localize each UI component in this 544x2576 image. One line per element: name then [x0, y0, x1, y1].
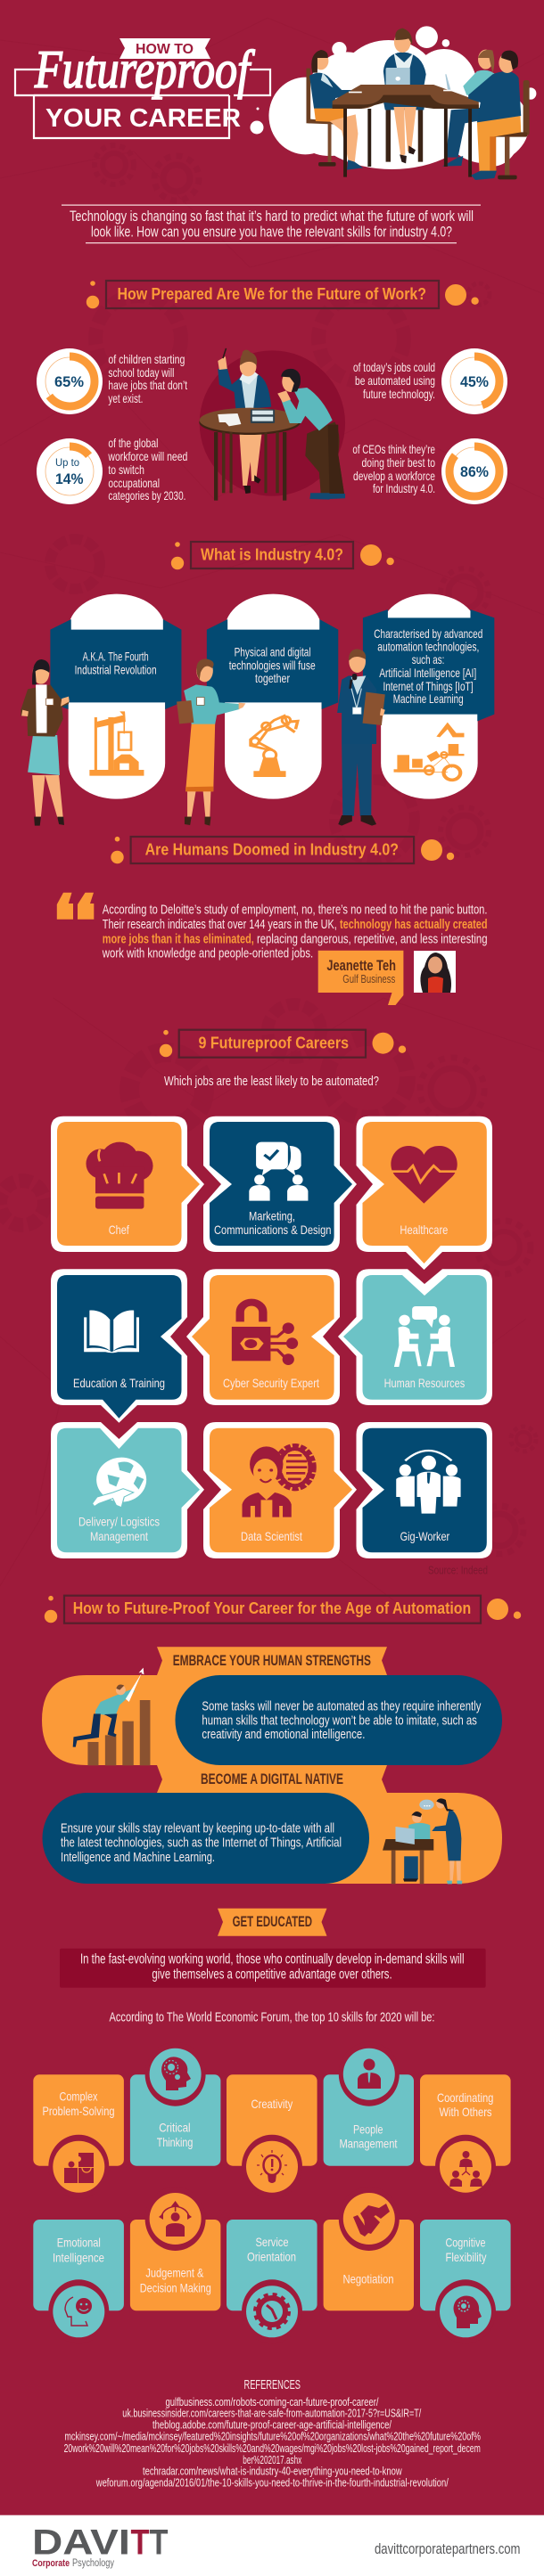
- skill: judgement and decision making: Decision Making: [140, 2280, 211, 2294]
- icon: person in suit: [358, 2058, 381, 2089]
- skill: service orientation: [227, 2220, 317, 2343]
- skill: cognitive flexibility: Cognitive: [446, 2236, 486, 2250]
- skill: critical thinking: [130, 2042, 220, 2166]
- career: gig worker: Gig-Worker: [400, 1529, 449, 1543]
- become text: the latest technologies, such as the Internet of Things, Artificial: [61, 1836, 342, 1851]
- card 1 text: [75, 650, 157, 677]
- illustration: woman and man at round table: [199, 348, 345, 501]
- card 3 text: Characterised by advanced: [374, 626, 482, 641]
- skill: critical thinking: Critical: [159, 2121, 191, 2135]
- skill: creativity: Creativity: [251, 2097, 293, 2111]
- icon: puzzle: [64, 2153, 94, 2183]
- your career: YOUR CAREER: [45, 104, 241, 133]
- stat: 65 percent: school today will: [108, 365, 174, 380]
- right woman: [442, 50, 497, 167]
- skill: emotional intelligence: Intelligence: [53, 2250, 104, 2264]
- become text: Intelligence and Machine Learning.: [61, 1851, 215, 1865]
- heading: how to future-proof: How to Future-Proof Your Career for the Age of Automation: [73, 1599, 471, 1617]
- icon: scientist and gear: [243, 1446, 312, 1517]
- career: cyber security: [186, 1269, 340, 1405]
- attribution callout: Jeanette Teh: [326, 957, 396, 974]
- icon: globe and plane: [92, 1458, 146, 1508]
- skill: complex problem-solving: Problem-Solving: [43, 2104, 114, 2118]
- industry cards art: [21, 594, 494, 826]
- card 3 text: Artificial Intelligence [AI]: [379, 666, 476, 680]
- stat: up to 14 percent: Up to: [55, 458, 79, 469]
- stat: 86 percent: [352, 438, 507, 504]
- career: healthcare: Healthcare: [400, 1223, 449, 1237]
- banner: embrace: [157, 1647, 387, 1675]
- references: ber%202017.ashx: [243, 2454, 302, 2466]
- banner: become: BECOME A DIGITAL NATIVE: [201, 1770, 343, 1787]
- card 3 text: Machine Learning: [393, 691, 464, 706]
- icon: decision arrows: [159, 2201, 192, 2237]
- references: uk.businessinsider.com/careers-that-are-safe-from-automation-2017-5?r=US&IR=T/: [122, 2408, 422, 2420]
- career: gig worker: [357, 1422, 492, 1558]
- logo: davitt: T: [130, 2523, 150, 2563]
- icon: chef hat: [86, 1142, 153, 1209]
- stat: 65 percent: yet exist.: [108, 391, 143, 405]
- career: data scientist: [203, 1422, 357, 1558]
- futureproof script word: Futureproof: [34, 40, 255, 99]
- stat: 86 percent: doing their best to: [362, 455, 435, 470]
- stat: 45 percent: 45%: [460, 373, 489, 390]
- card 3 text: Internet of Things [IoT]: [383, 679, 473, 693]
- quote text: [102, 904, 487, 961]
- icon: two people talking: [394, 1306, 455, 1367]
- illustration: person climbing bars: [73, 1668, 150, 1765]
- icon: open book: [84, 1311, 139, 1353]
- career: chef: [51, 1116, 204, 1252]
- intro text block: [62, 205, 481, 243]
- stat: 65 percent: 65%: [54, 373, 84, 390]
- banner: become: [157, 1765, 387, 1793]
- skill: complex problem-solving: Complex: [59, 2089, 98, 2104]
- skill: service orientation: Service: [255, 2235, 289, 2249]
- skill: coordinating with others: With Others: [439, 2105, 492, 2119]
- career: cyber security: Cyber Security Expert: [223, 1376, 319, 1390]
- career: human resources: Human Resources: [384, 1376, 465, 1390]
- hero illustration: team meeting on a cloud: [268, 26, 536, 180]
- career: data scientist: Data Scientist: [241, 1529, 302, 1543]
- references: REFERENCES: [244, 2377, 301, 2392]
- source note: Source: Indeed: [428, 1564, 488, 1577]
- skill: judgement and decision making: [130, 2187, 220, 2310]
- heading: 9 futureproof careers: [160, 1030, 406, 1058]
- quote text: Their research indicates that over 144 years in the UK,: [103, 918, 337, 932]
- quote text: replacing dangerous, repetitive, and less interesting: [257, 932, 487, 946]
- seated woman: [218, 348, 271, 494]
- quote text: technology has actually created: [340, 918, 487, 932]
- stat: up to 14 percent: of the global: [108, 436, 158, 450]
- card 2 text: Physical and digital: [235, 645, 311, 659]
- card 2 text: together: [255, 671, 290, 685]
- logo: davitt: Corporate: [32, 2558, 70, 2569]
- icon: gear and wrench: [255, 2294, 289, 2328]
- card 3 pill and banner: [363, 594, 494, 799]
- skill: negotiation: [324, 2187, 414, 2310]
- card 1 pill and banner: [50, 594, 181, 799]
- title frame upper: [15, 70, 270, 95]
- stat: up to 14 percent: 14%: [55, 470, 84, 487]
- career: delivery logistics: [51, 1422, 204, 1558]
- quote block: [57, 893, 488, 1005]
- get educated text box: give themselves a competitive advantage over others.: [152, 1967, 392, 1983]
- table: [333, 85, 479, 177]
- stat: 65 percent: have jobs that don’t: [108, 378, 187, 392]
- card 2 text: [229, 645, 316, 685]
- center woman: [383, 29, 426, 163]
- heading: how prepared: [87, 281, 479, 308]
- icon: digital padlock: [232, 1303, 298, 1365]
- icon: factory line: [394, 723, 464, 780]
- career: healthcare: [357, 1116, 492, 1270]
- banner: how to: HOW TO: [136, 42, 194, 57]
- skill: people management: [324, 2042, 414, 2166]
- icon: conversation bubbles: [249, 1142, 308, 1201]
- attribution callout: Gulf Business: [342, 973, 395, 985]
- logo: davitt: Psychology: [72, 2558, 114, 2569]
- stat: 45 percent: of today’s jobs could: [353, 360, 435, 374]
- career: delivery logistics: Delivery/ Logistics: [78, 1515, 160, 1529]
- icon: quotation marks: [57, 893, 94, 920]
- navy text pill: [175, 1675, 502, 1765]
- skill: emotional intelligence: [33, 2220, 124, 2343]
- banner: embrace: EMBRACE YOUR HUMAN STRENGTHS: [173, 1652, 371, 1669]
- section: embrace your human strengths: [42, 1647, 502, 1765]
- stat: 65 percent: [37, 348, 187, 414]
- skill: service orientation: Orientation: [247, 2249, 296, 2263]
- illustration: colleague helping at laptop: [383, 1798, 462, 1884]
- embrace text: creativity and emotional intelligence.: [202, 1728, 365, 1742]
- logo: davitt: T: [150, 2523, 168, 2563]
- career: education: Education & Training: [73, 1376, 165, 1390]
- heading: how to future-proof: [45, 1596, 521, 1623]
- icon: head with smile: [65, 2297, 92, 2326]
- career: human resources: [338, 1269, 492, 1405]
- skills intro line: According to The World Economic Forum, the top 10 skills for 2020 will be:: [109, 2010, 435, 2024]
- references: techradar.com/news/what-is-industry-40-everything-you-need-to-know: [143, 2466, 402, 2478]
- round table: [199, 408, 301, 501]
- career: delivery logistics: Management: [90, 1529, 148, 1543]
- left woman: [306, 50, 363, 170]
- figure: presenter woman with brown jacket: [21, 659, 70, 826]
- skill: coordinating with others: [420, 2074, 511, 2199]
- heading: are humans doomed: Are Humans Doomed in Industry 4.0?: [145, 841, 399, 859]
- standing man: [277, 369, 345, 500]
- career: education: [51, 1269, 187, 1423]
- become text: Ensure your skills stay relevant by keeping up-to-date with all: [61, 1822, 334, 1836]
- careers subtitle: Which jobs are the least likely to be automated?: [164, 1075, 379, 1089]
- icon: team network: [449, 2151, 482, 2187]
- card 3 text: such as:: [412, 652, 444, 666]
- card 1 text: Industrial Revolution: [75, 663, 157, 677]
- background pattern of gears: [0, 18, 544, 1613]
- right man: [468, 51, 530, 180]
- skill: critical thinking: Thinking: [157, 2135, 193, 2149]
- skill: cognitive flexibility: [420, 2220, 511, 2343]
- stat: 86 percent: 86%: [460, 463, 489, 480]
- career: chef: Chef: [109, 1223, 129, 1237]
- quote text: work with knowledge and people-oriented jobs.: [102, 946, 313, 961]
- title: [15, 38, 270, 138]
- icon: head with gears: [161, 2057, 191, 2090]
- icon: three workers: [396, 1451, 461, 1514]
- card 1 text: A.K.A. The Fourth: [83, 650, 149, 664]
- heading: what is industry 4.0: What is Industry 4.0?: [201, 545, 343, 563]
- title frame lower: [34, 95, 229, 138]
- skill: judgement and decision making: Judgement &: [145, 2266, 204, 2280]
- stat: up to 14 percent: categories by 2030.: [108, 488, 185, 503]
- attribution callout: [318, 951, 403, 1005]
- card 2 pill and banner: [207, 594, 338, 799]
- card 3 text: automation technologies,: [377, 640, 479, 654]
- stat: up to 14 percent: occupational: [108, 476, 160, 490]
- stat: 86 percent: develop a workforce: [353, 469, 435, 483]
- skill: complex problem-solving: [33, 2074, 124, 2199]
- skill: creativity: [227, 2074, 317, 2199]
- heading: 9 futureproof careers: 9 Futureproof Careers: [198, 1034, 349, 1051]
- figure: speaking man with clipboard: [337, 649, 385, 826]
- stat: 45 percent: be automated using: [355, 373, 435, 388]
- banner: get educated: GET EDUCATED: [233, 1913, 312, 1930]
- navy text pill: [43, 1793, 369, 1884]
- become text: [61, 1822, 342, 1865]
- stat: 65 percent: of children starting: [108, 352, 185, 366]
- banner: how to: [120, 38, 210, 59]
- icon: robot arm: [251, 716, 298, 776]
- icon: heart with pulse: [391, 1146, 457, 1204]
- portrait photo: [414, 951, 456, 993]
- logo: davitt: DAVI: [32, 2523, 130, 2563]
- card 3 text: [374, 626, 482, 706]
- logo: davitt: [32, 2523, 168, 2569]
- career: marketing: Communications & Design: [214, 1223, 332, 1237]
- icon: head with cog: [453, 2296, 482, 2328]
- heading: what is industry 4.0: [171, 542, 394, 569]
- figure: presenter woman with orange skirt: [177, 658, 245, 826]
- icon: oil pump: [89, 711, 144, 776]
- orange pill right: [268, 1793, 502, 1884]
- cloud: [268, 26, 536, 169]
- references: gulfbusiness.com/robots-coming-can-future-proof-career/: [166, 2396, 379, 2408]
- skill: emotional intelligence: Emotional: [57, 2236, 101, 2250]
- references: [64, 2377, 481, 2489]
- icon: handshake: [353, 2204, 390, 2237]
- embrace text: human skills that technology won’t be able to imitate, such as: [202, 1714, 477, 1729]
- skill: cognitive flexibility: Flexibility: [446, 2250, 487, 2264]
- references: theblog.adobe.com/future-proof-career-age-artificial-intelligence/: [152, 2418, 392, 2431]
- stat: 45 percent: future technology.: [363, 387, 435, 401]
- stat: 45 percent: [353, 348, 507, 414]
- card 2 text: technologies will fuse: [229, 658, 316, 673]
- icon: lightbulb: [257, 2150, 287, 2183]
- stat: 86 percent: for Industry 4.0.: [373, 481, 435, 495]
- stat: up to 14 percent: to switch: [108, 462, 144, 477]
- skill: coordinating with others: Coordinating: [437, 2090, 493, 2105]
- stat: up to 14 percent: workforce will need: [108, 449, 187, 463]
- skill: people management: Management: [339, 2137, 398, 2151]
- quote text: more jobs than it has eliminated,: [103, 932, 254, 946]
- banner: get educated: [218, 1909, 326, 1936]
- career: marketing: [203, 1116, 357, 1252]
- section: become a digital native: [43, 1765, 502, 1884]
- stat: 86 percent: of CEOs think they’re: [352, 442, 435, 456]
- orange pill: [42, 1675, 268, 1765]
- career: marketing: Marketing,: [249, 1208, 295, 1223]
- title dots: [250, 107, 264, 134]
- skill: people management: People: [353, 2122, 383, 2136]
- heading: how prepared: How Prepared Are We for the Future of Work?: [118, 285, 426, 303]
- footer: [0, 2515, 544, 2576]
- skill: negotiation: Negotiation: [342, 2272, 394, 2286]
- get educated text box: [60, 1949, 486, 1988]
- embrace text: [202, 1699, 482, 1742]
- heading: are humans doomed: [111, 837, 454, 863]
- stat: up to 14 percent: [37, 436, 187, 504]
